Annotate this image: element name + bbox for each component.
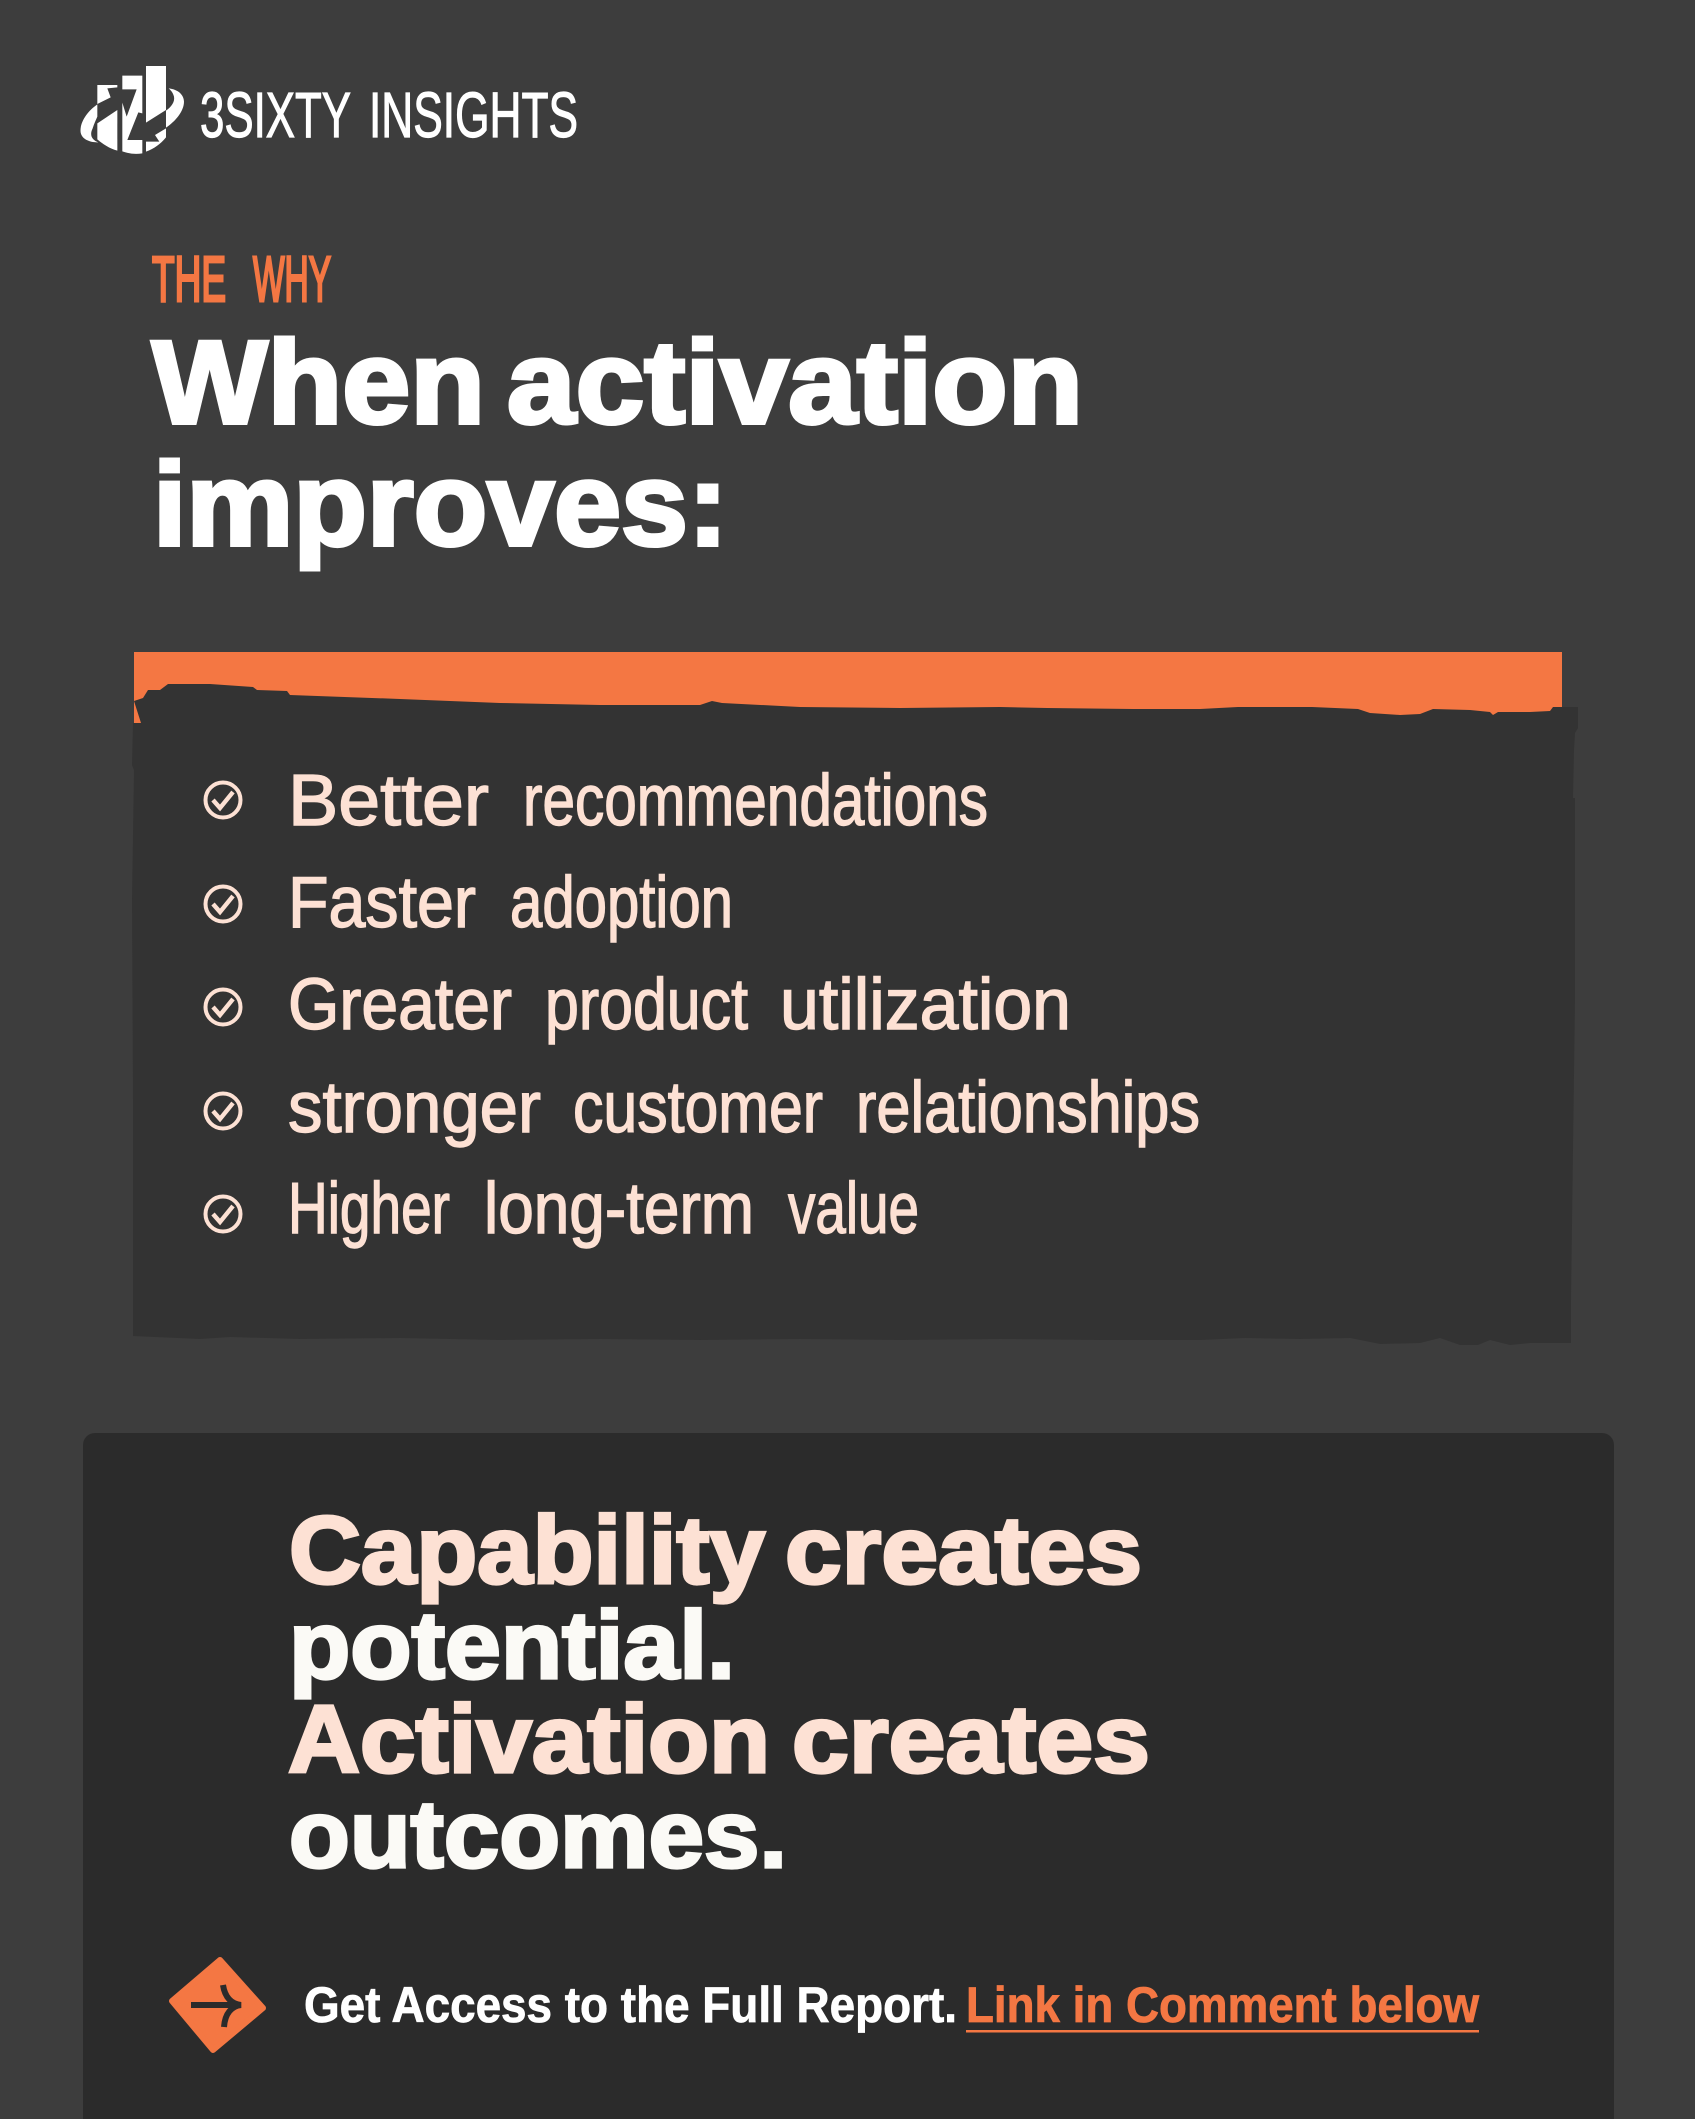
eyebrow: THE WHY: THE bbox=[152, 243, 226, 315]
panel: benefits list bbox=[132, 652, 1578, 1345]
label: stronger bbox=[288, 1068, 541, 1148]
icon: logo mark bbox=[81, 66, 184, 154]
logo wordmark: 3SIXTY bbox=[200, 79, 351, 151]
title: When activation improves: improves: bbox=[153, 439, 728, 571]
statement headline: potential. bbox=[289, 1592, 735, 1699]
label bbox=[288, 1068, 1200, 1148]
eyebrow: THE WHY: WHY bbox=[253, 243, 331, 315]
logo wordmark: INSIGHTS bbox=[369, 79, 578, 151]
title: When activation improves bbox=[152, 317, 1083, 571]
list item: Better recommendations bbox=[206, 761, 988, 841]
list item: Faster adoption bbox=[206, 863, 733, 943]
icon: check circle bbox=[206, 990, 240, 1024]
label: recommendations bbox=[523, 761, 988, 841]
label: Faster bbox=[288, 863, 476, 943]
label: Better bbox=[288, 761, 489, 841]
icon: check circle bbox=[206, 782, 240, 818]
label: customer bbox=[573, 1068, 823, 1148]
title: When activation improves: activation bbox=[507, 317, 1083, 449]
icon: orange diamond arrow bbox=[172, 1960, 263, 2050]
statement headline: Capability bbox=[289, 1497, 765, 1604]
label bbox=[288, 965, 1071, 1045]
statement headline: creates bbox=[792, 1686, 1150, 1793]
label: Higher bbox=[288, 1169, 450, 1249]
list item: Higher long-term value bbox=[206, 1169, 919, 1249]
icon: check circle bbox=[206, 886, 240, 922]
label bbox=[288, 761, 988, 841]
label: Greater bbox=[288, 965, 512, 1045]
panel background bbox=[83, 1433, 1614, 2119]
label bbox=[288, 1169, 919, 1249]
statement headline: creates bbox=[785, 1497, 1142, 1604]
orange header bar bbox=[134, 652, 1562, 727]
list item: stronger customer relationships bbox=[206, 1068, 1200, 1148]
icon: check circle bbox=[206, 1094, 240, 1128]
label: product bbox=[545, 965, 748, 1045]
label: relationships bbox=[856, 1068, 1200, 1148]
icon: check circle bbox=[206, 1196, 240, 1232]
title: When activation improves: When bbox=[152, 317, 485, 449]
call to action link: Link in Comment below bbox=[966, 1977, 1479, 2033]
label: value bbox=[788, 1169, 919, 1249]
list item: Greater product utilization bbox=[206, 965, 1071, 1045]
statement headline: Activation bbox=[288, 1686, 770, 1793]
statement headline bbox=[288, 1497, 1150, 1888]
label: long-term bbox=[484, 1169, 754, 1249]
torn paper background bbox=[132, 684, 1578, 1345]
label: adoption bbox=[510, 863, 733, 943]
panel: closing statement bbox=[83, 1433, 1614, 2119]
statement headline: outcomes. bbox=[289, 1781, 787, 1888]
call to action text: Get Access to the Full Report. bbox=[304, 1977, 957, 2033]
label: utilization bbox=[780, 965, 1071, 1045]
label bbox=[288, 863, 733, 943]
logo wordmark bbox=[200, 79, 578, 151]
logo: 3SIXTY INSIGHTS bbox=[81, 66, 578, 154]
